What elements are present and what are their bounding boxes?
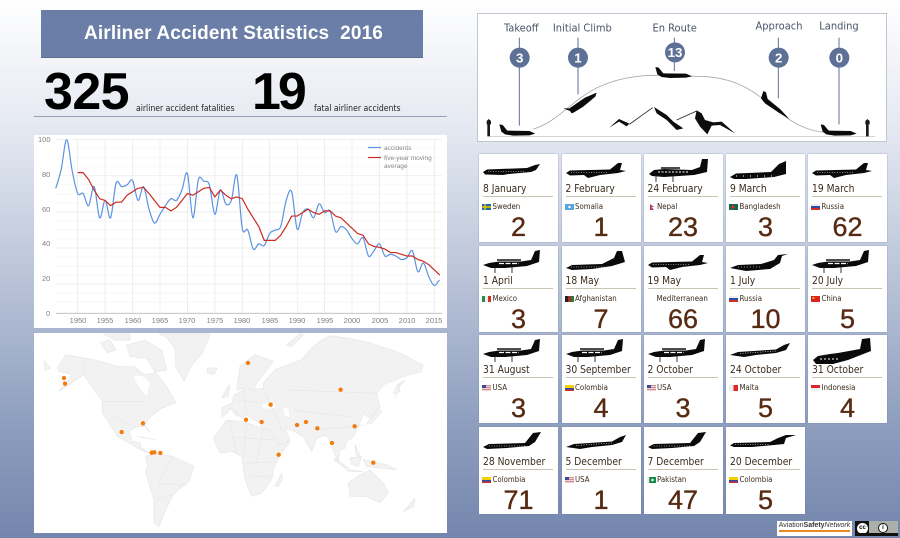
card: 1 April, Mexico: [479, 246, 558, 332]
axis labels: 1970: [179, 316, 195, 325]
card: 24 February, Nepal: 24 February: [648, 184, 703, 195]
axis labels: 1965: [152, 316, 168, 325]
stat: accidents: [252, 63, 400, 121]
card: 2 October, USA: USA: [657, 383, 672, 392]
card: 31 August, USA: USA: [492, 383, 507, 392]
mountains: [609, 107, 735, 134]
axis labels: 1950: [70, 316, 86, 325]
card: 31 October, Indonesia: 31 October: [812, 365, 863, 376]
card: 30 September, Colombia: Colombia: [575, 383, 608, 392]
logo: Aviation Safety Network: AviationSafetyNetwork: [779, 522, 850, 529]
phase labels: [503, 19, 859, 34]
card: 19 March, Russia: Russia: [822, 202, 844, 211]
flight path curve: [533, 75, 823, 132]
axis labels: [38, 135, 442, 325]
axis labels: 2005: [372, 316, 388, 325]
card: 24 February, Nepal: Nepal: [657, 202, 677, 211]
card: 20 December, Colombia: Colombia: [740, 475, 772, 484]
card: 20 December, Colombia: 20 December: [730, 457, 792, 468]
title: Airliner Accident Statistics 2016: [84, 23, 383, 44]
card: 1 April, Mexico: 3: [511, 304, 526, 334]
axis labels: 0: [46, 309, 50, 318]
card: 1 July, Russia: 10: [750, 304, 781, 334]
card: 9 March, Bangladesh: 9 March: [730, 184, 767, 195]
card: 20 December, Colombia: [726, 427, 805, 514]
card: 31 August, USA: 31 August: [483, 365, 530, 376]
axis labels: 2010: [399, 316, 415, 325]
card: 7 December, Pakistan: Pakistan: [657, 475, 686, 484]
panel: flight phases: 2: [775, 50, 782, 65]
axis labels: 2015: [426, 316, 442, 325]
card: 24 October, Malta: [726, 335, 805, 423]
card: 7 December, Pakistan: 47: [668, 485, 698, 515]
axis labels: 1960: [125, 316, 141, 325]
card: 24 February, Nepal: [644, 154, 722, 242]
card: 1 July, Russia: [726, 246, 805, 332]
legend: five-year moving: [384, 155, 432, 162]
stat label: fatalities: airliner accident fatalities: [136, 104, 235, 114]
card: 5 December, USA: 1: [593, 485, 609, 515]
axis labels: 60: [42, 205, 50, 214]
card: 28 November, Colombia: 71: [503, 485, 534, 515]
card: 20 July, China: 5: [840, 304, 855, 334]
card: 8 January, Sweden: Sweden: [492, 202, 520, 211]
card: 8 January, Sweden: 2: [511, 212, 526, 242]
card: 18 May, Afghanistan: 7: [593, 304, 609, 334]
legend: accidents: [384, 145, 412, 152]
phase labels: Takeoff: [503, 21, 540, 34]
axis labels: 80: [42, 170, 50, 179]
card: 28 November, Colombia: [479, 427, 558, 514]
axis labels: 1995: [317, 316, 333, 325]
stat number: 325: 325: [44, 63, 129, 121]
card: 30 September, Colombia: [562, 335, 640, 423]
stat number: 19: 19: [252, 63, 304, 121]
card: 31 October, Indonesia: [808, 335, 887, 423]
stat: fatalities: [44, 63, 235, 121]
axis labels: 1955: [97, 316, 113, 325]
panel: line chart: [34, 135, 447, 328]
card: 2 February, Somalia: 1: [593, 212, 609, 242]
card: 2 October, USA: 3: [675, 393, 691, 423]
panel: flight phases: 1: [574, 50, 582, 65]
card: 1 July, Russia: 1 July: [730, 276, 755, 287]
axis labels: 1980: [234, 316, 250, 325]
card: 18 May, Afghanistan: [562, 246, 640, 332]
axis labels: 100: [38, 135, 51, 144]
card: 1 July, Russia: Russia: [740, 294, 762, 303]
card: 31 October, Indonesia: Indonesia: [822, 383, 855, 392]
ground line: [490, 136, 875, 138]
card: 18 May, Afghanistan: Afghanistan: [575, 294, 617, 303]
card: 7 December, Pakistan: [644, 427, 722, 514]
card: 30 September, Colombia: 30 September: [566, 365, 631, 376]
accidents line: [56, 140, 440, 286]
accident locations: [62, 361, 375, 465]
logo: Creative Commons license: [855, 521, 898, 536]
card: 24 February, Nepal: 23: [668, 212, 698, 242]
panel: flight phases: 0: [836, 50, 843, 65]
phase labels: Initial Climb: [553, 21, 612, 34]
phase labels: Approach: [756, 19, 802, 32]
card: 24 October, Malta: 24 October: [730, 365, 781, 376]
towers: [487, 119, 870, 136]
card: 2 February, Somalia: [562, 154, 640, 242]
logo: Creative Commons license: i: [882, 525, 884, 531]
card: 5 December, USA: [562, 427, 640, 514]
country borders: [84, 358, 378, 500]
title: [41, 10, 423, 58]
card: 19 May, Mediterranean: Mediterranean: [656, 294, 708, 303]
card: 19 March, Russia: 19 March: [812, 184, 854, 195]
card: 1 April, Mexico: Mexico: [492, 294, 517, 303]
card: 31 August, USA: 3: [511, 393, 526, 423]
card: 31 August, USA: [479, 335, 558, 423]
card: 30 September, Colombia: 4: [593, 393, 609, 423]
card: 19 May, Mediterranean: 66: [668, 304, 698, 334]
card: 28 November, Colombia: Colombia: [492, 475, 525, 484]
card: 5 December, USA: 5 December: [566, 457, 622, 468]
card: 7 December, Pakistan: 7 December: [648, 457, 704, 468]
phase labels: Landing: [819, 19, 859, 32]
axis labels: 1990: [289, 316, 305, 325]
card: 19 May, Mediterranean: [644, 246, 722, 332]
card: 24 October, Malta: 5: [758, 393, 773, 423]
legend: [368, 145, 432, 170]
axis labels: 1975: [207, 316, 223, 325]
card: 19 March, Russia: [808, 154, 887, 242]
card: 2 October, USA: 2 October: [648, 365, 693, 376]
logo: Aviation Safety Network: [777, 521, 852, 536]
card: 2 February, Somalia: Somalia: [575, 202, 603, 211]
phase labels: En Route: [652, 21, 697, 34]
connector lines: [519, 38, 839, 126]
phase counts: [510, 42, 849, 68]
axis labels: 2000: [344, 316, 360, 325]
card: 8 January, Sweden: 8 January: [483, 184, 526, 195]
land masses: [44, 333, 423, 526]
panel: flight phases: 3: [516, 50, 523, 65]
card: 18 May, Afghanistan: 18 May: [566, 276, 599, 287]
inland water: [134, 376, 289, 417]
axis labels: 40: [42, 239, 50, 248]
axis labels: 20: [42, 274, 50, 283]
planes on the path: [499, 67, 857, 136]
logo: Creative Commons license: cc: [859, 525, 866, 531]
card: 31 October, Indonesia: 4: [840, 393, 855, 423]
panel: flight phases: 13: [668, 45, 682, 60]
axis labels: 1985: [262, 316, 278, 325]
card: 24 October, Malta: Malta: [740, 383, 759, 392]
panel: flight phases: [477, 13, 887, 142]
card: 8 January, Sweden: [479, 154, 558, 242]
card: 20 July, China: [808, 246, 887, 332]
card: 20 July, China: 20 July: [812, 276, 843, 287]
legend: average: [384, 163, 408, 170]
five-year moving average line: [78, 173, 440, 275]
card: 19 May, Mediterranean: 19 May: [648, 276, 681, 287]
card: 19 March, Russia: 62: [832, 212, 863, 242]
card: 5 December, USA: USA: [575, 475, 590, 484]
stat label: accidents: fatal airliner accidents: [314, 104, 400, 114]
card: 9 March, Bangladesh: Bangladesh: [740, 202, 781, 211]
card: 1 April, Mexico: 1 April: [483, 276, 513, 287]
card: 28 November, Colombia: 28 November: [483, 457, 545, 468]
card: 2 February, Somalia: 2 February: [566, 184, 615, 195]
card: 2 October, USA: [644, 335, 722, 423]
card: 9 March, Bangladesh: 3: [758, 212, 773, 242]
card: 9 March, Bangladesh: [726, 154, 805, 242]
card: 20 December, Colombia: 5: [758, 485, 773, 515]
panel: world map: [34, 333, 447, 533]
card: 20 July, China: China: [822, 294, 842, 303]
